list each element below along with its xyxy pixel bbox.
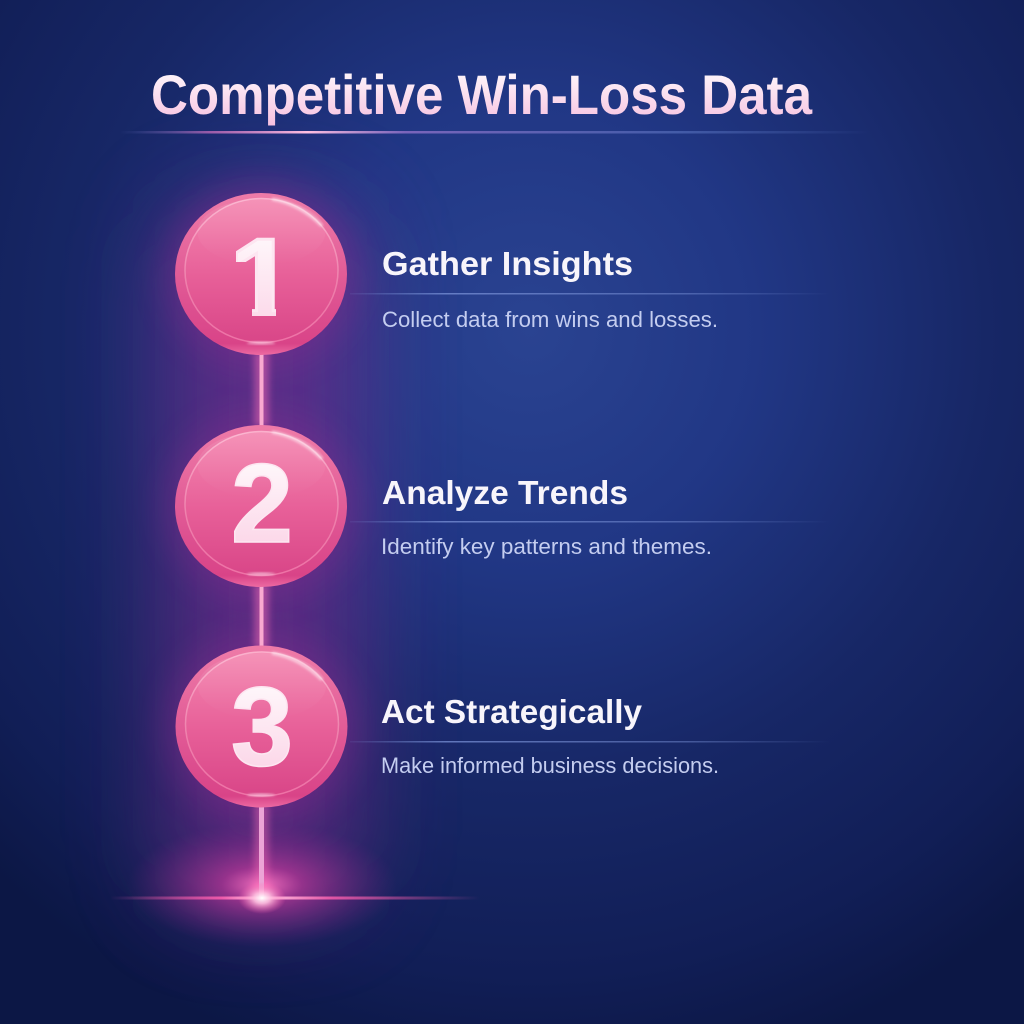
badge 2 xyxy=(175,425,347,587)
step 1 description: Collect data from wins and losses. xyxy=(382,307,718,332)
step 2 heading: Analyze Trends xyxy=(382,474,628,511)
step 3 description: Make informed business decisions. xyxy=(381,753,719,778)
title: Competitive Win-Loss Data xyxy=(151,63,813,126)
step 1 heading: Gather Insights xyxy=(382,245,633,282)
number 2: 2 xyxy=(231,441,293,566)
step 2 description: Identify key patterns and themes. xyxy=(381,534,712,559)
badge 1 xyxy=(175,193,347,355)
glow behind badges xyxy=(127,180,397,947)
floor flare xyxy=(110,882,480,914)
badge 3 xyxy=(176,646,348,808)
step 3 heading: Act Strategically xyxy=(381,693,643,730)
connector lines xyxy=(254,352,269,897)
step 2 text xyxy=(350,474,830,559)
step 3 text xyxy=(350,693,830,778)
step 1 text xyxy=(350,245,830,332)
title underline xyxy=(120,131,870,134)
number 3: 3 xyxy=(231,664,293,789)
number 1: 1 xyxy=(228,213,296,349)
